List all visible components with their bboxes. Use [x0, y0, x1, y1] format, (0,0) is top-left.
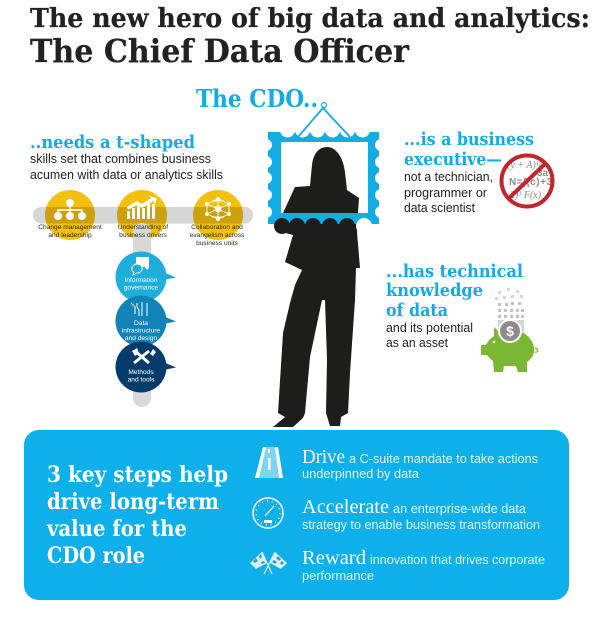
- text block: business executive: not a technician,: [404, 170, 493, 184]
- text block: technical knowledge: [386, 261, 523, 350]
- text block: t-shaped skills: acumen with data or analytics skills: [30, 168, 223, 182]
- text block: technical knowledge: of data: [386, 300, 448, 321]
- icon: no formulas sign: N=∫(c)+3: [509, 177, 552, 188]
- bubble: methods and tools: and tools: [128, 376, 155, 384]
- heading: The CDO: The CDO..: [196, 84, 318, 113]
- icon: org chart: [54, 199, 86, 220]
- icon: network globe: [206, 198, 230, 220]
- step: drive: Drive: [302, 447, 345, 468]
- bubble: data infrastructure and design: infrastructure: [122, 328, 161, 334]
- yellow circles row: [45, 190, 243, 240]
- bubble: information governance: governance: [124, 284, 159, 292]
- yellow circle labels: business units: [196, 240, 239, 247]
- panel heading: drive long-term: [47, 489, 219, 515]
- bubble: methods and tools: Methods: [128, 369, 154, 376]
- text block: business executive: programmer or: [404, 186, 487, 200]
- panel heading: [46, 462, 228, 569]
- icon: no formulas sign: 2)³ F(x): [510, 190, 542, 201]
- text block: t-shaped skills: ..needs a t-shaped: [30, 132, 195, 153]
- panel heading: value for the: [46, 516, 187, 542]
- bubble: information governance: [116, 252, 176, 302]
- step: drive: [302, 447, 538, 481]
- step: drive: a C-suite mandate to take actions: [349, 451, 538, 466]
- text block: technical knowledge: and its potential: [386, 321, 473, 335]
- icon: rising bars: [127, 196, 157, 219]
- bubble: information governance: Information: [124, 277, 158, 284]
- step: reward: [302, 548, 545, 583]
- icon: road: [255, 447, 283, 478]
- yellow circle labels: Collaboration and: [191, 224, 243, 231]
- step: accelerate: strategy to enable business transformation: [302, 517, 540, 532]
- title: The new hero of big data and analytics:: [30, 4, 590, 34]
- bubble: methods and tools: [116, 342, 176, 392]
- hanging wire: [298, 102, 350, 137]
- panel heading: CDO role: [47, 543, 145, 569]
- title: [30, 4, 590, 70]
- text block: t-shaped skills: [30, 132, 223, 182]
- step: drive: underpinned by data: [302, 466, 420, 481]
- yellow circle labels: and leadership: [48, 232, 92, 239]
- picture frame: [260, 102, 387, 234]
- t-shaped skills diagram: [33, 190, 253, 407]
- icon: no formulas sign: 3a: [537, 168, 549, 179]
- step: accelerate: Accelerate: [302, 497, 389, 518]
- text block: technical knowledge: knowledge: [386, 280, 483, 301]
- panel: 3 key steps: [24, 430, 569, 600]
- icon: piggy bank with coin: $: [506, 323, 514, 339]
- yellow circle labels: Change management: [38, 224, 102, 231]
- step: reward: innovation that drives corporate: [370, 552, 545, 567]
- icon: checkered flags: [250, 552, 287, 574]
- step: accelerate: an enterprise-wide data: [393, 501, 527, 516]
- yellow circle labels: [38, 224, 245, 247]
- yellow circle labels: business drivers: [119, 232, 168, 239]
- text block: t-shaped skills: skills set that combines business: [30, 152, 211, 166]
- text block: business executive: executive—: [404, 149, 502, 170]
- bubble: data infrastructure and design: [116, 296, 176, 346]
- yellow circle labels: Understanding of: [118, 224, 168, 231]
- yellow circle labels: evangelism across: [190, 232, 245, 239]
- panel heading: 3 key steps help: [47, 462, 228, 488]
- text block: business executive: ...is a business: [404, 129, 534, 150]
- text block: technical knowledge: as an asset: [386, 336, 449, 350]
- icon: no formulas sign: (y + A)¹²: [507, 160, 543, 171]
- step: reward: Reward: [302, 548, 366, 569]
- silhouette of executive: [273, 147, 360, 427]
- title: The Chief Data Officer: [30, 32, 410, 70]
- text block: business executive: [404, 129, 534, 215]
- step: accelerate: [302, 497, 540, 532]
- step: reward: performance: [302, 568, 374, 583]
- icon: piggy bank with coin: [481, 288, 538, 372]
- icon: speedometer: [253, 498, 283, 528]
- text block: business executive: data scientist: [404, 201, 475, 215]
- bubble: data infrastructure and design: and design: [125, 335, 157, 342]
- bubble: data infrastructure and design: Data: [134, 320, 148, 327]
- icon: no formulas sign: [502, 156, 552, 206]
- text block: technical knowledge: ...has technical: [386, 261, 523, 282]
